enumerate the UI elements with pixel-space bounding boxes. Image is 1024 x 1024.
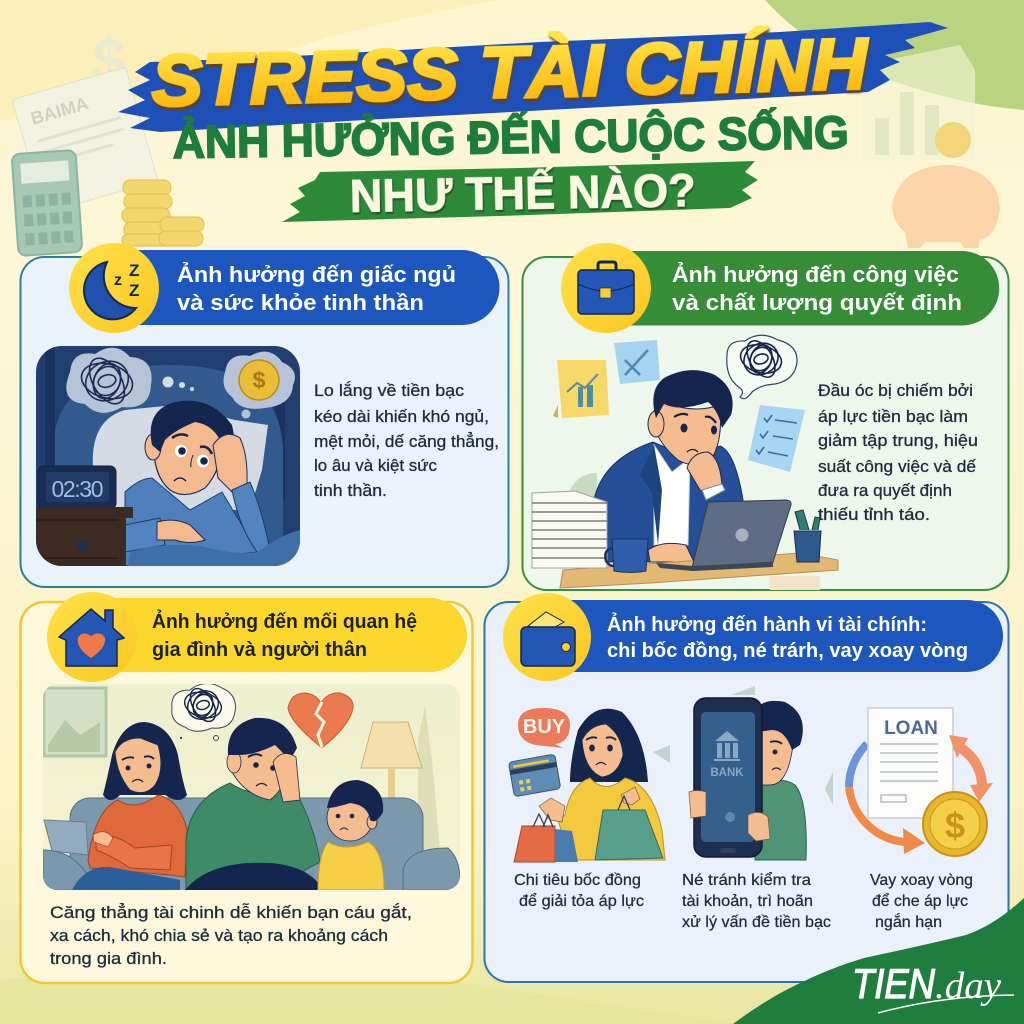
alarm clock: 02:30 [52, 476, 104, 502]
thought bubble: coin [224, 352, 295, 409]
caption: impulse: để giải tỏa áp lực [519, 892, 644, 910]
sticky note: checklist [748, 405, 805, 472]
text: sleep: kéo dài khiến khó ngủ, [314, 407, 489, 426]
phone [694, 698, 762, 857]
icon: moon [69, 243, 159, 333]
text: work: thiếu tỉnh táo. [818, 505, 930, 524]
man [593, 370, 752, 562]
text: family [50, 903, 412, 968]
caption: loan: Vay xoay vòng [870, 872, 973, 889]
text: sleep: mệt mỏi, dế căng thẳng, [314, 432, 499, 451]
illustration: loan cycle [849, 708, 993, 856]
man [125, 401, 270, 566]
text: family: trong gia đình. [50, 949, 167, 968]
mug [605, 539, 648, 572]
thought bubble: coin: $ [253, 367, 266, 393]
text: sleep: tinh thần. [314, 481, 387, 500]
header: work: và chất lượng quyết định [672, 290, 962, 315]
title line 3: NHƯ THẾ NÀO? [349, 164, 696, 222]
header: sleep [130, 250, 500, 325]
brush: blue [118, 22, 948, 132]
header: family: gia đình và người thân [152, 639, 367, 661]
sticky note: graph [614, 340, 660, 384]
footer: green wave with logo [733, 898, 1024, 1024]
lamp [361, 722, 422, 802]
illustration: stressed man at desk [532, 335, 838, 590]
header: work: Ảnh hưởng đến công việc [672, 262, 959, 287]
background finance decorations: BAIMA [28, 93, 91, 129]
child [318, 780, 384, 890]
title line 2: ẢNH HƯỞNG ĐẾN CUỘC SỐNG [172, 106, 849, 168]
loan document [868, 708, 953, 818]
background finance decorations: $ [92, 27, 126, 96]
wall picture [44, 688, 106, 756]
icon: moon: Z [129, 261, 139, 280]
sticky note: chart [553, 360, 609, 418]
illustration: family on sofa [43, 683, 460, 893]
icon: house with heart [47, 592, 137, 682]
man on sofa [185, 718, 323, 890]
desk [560, 553, 838, 590]
text: sleep: lo âu và kiệt sức [314, 456, 437, 475]
icon: moon: Z [129, 281, 139, 300]
icon: briefcase [561, 243, 651, 333]
logo [852, 960, 1014, 1013]
panel: family [20, 592, 472, 983]
caption: impulse: Chi tiêu bốc đồng [514, 872, 641, 889]
brush: green [282, 161, 758, 222]
title [118, 22, 948, 222]
text: family: Căng thẳng tài chinh dễ khiến bạn cáu gắt, [50, 903, 412, 922]
thought bubble: work [727, 335, 797, 399]
text: work: suất công việc và dế [818, 457, 977, 476]
caption: loan: để che áp lực [872, 892, 968, 910]
caption: loan: ngắn hạn [875, 912, 942, 931]
icon: moon: z [114, 272, 122, 289]
logo: .day [935, 965, 1001, 1007]
caption: impulse [514, 872, 644, 910]
header: sleep: Ảnh hưởng đến giấc ngủ [177, 262, 456, 287]
paper stack [532, 491, 607, 568]
text: work: giảm tập trung, hiệu [818, 431, 978, 450]
woman [72, 722, 187, 890]
broken heart [288, 693, 353, 747]
caption: avoidance: xử lý vấn đề tiền bạc [682, 914, 831, 931]
header: work [625, 251, 999, 326]
header: financial behaviour: chi bốc đồng, né trárh, vay xoay vòng [607, 639, 968, 662]
text: sleep: Lo lắng về tiền bạc [314, 381, 465, 400]
panel: sleep [20, 243, 508, 587]
icon: wallet [503, 593, 591, 681]
credit card [508, 754, 561, 797]
speech bubble: BUY: BUY [523, 716, 566, 738]
header: sleep: và sức khỏe tinh thần [177, 290, 424, 315]
caption: avoidance: Né tránh kiểm tra [682, 871, 811, 889]
coin [923, 792, 987, 856]
nightstand [36, 507, 133, 566]
illustration: man awake in bed [36, 346, 300, 566]
title line 1: STRESS TÀI CHÍNH [150, 24, 870, 122]
header: family [110, 598, 467, 672]
header: family: Ảnh hưởng đến mối quan hệ [152, 610, 417, 633]
laptop [656, 500, 791, 571]
header: financial behaviour: Ảnh hưởng đến hành vi tài chính: [607, 613, 927, 636]
panel: financial behaviour [484, 593, 1008, 982]
text: work: áp lực tiền bạc làm [818, 407, 968, 426]
text: sleep [314, 381, 499, 500]
logo: TIEN [852, 960, 936, 1007]
sofa [43, 798, 460, 893]
pen cup [794, 510, 821, 562]
text: work: Đầu óc bị chiếm bởi [818, 381, 973, 400]
panel: work [522, 243, 1008, 590]
caption: avoidance [682, 871, 831, 931]
caption: avoidance: tài khoản, trì hoãn [682, 893, 813, 910]
caption: loan [870, 872, 973, 931]
woman with bags [514, 709, 665, 862]
loan document: LOAN [884, 718, 938, 739]
text: work [818, 381, 978, 524]
coin: $ [945, 805, 965, 846]
illustration: hiding behind bank phone [689, 698, 806, 860]
thought bubble: family [172, 683, 235, 740]
speech bubble: BUY [518, 708, 570, 748]
alarm clock [38, 466, 116, 509]
text: work: đưa ra quyết định [818, 481, 952, 500]
text: family: xa cách, khó chia sẻ và tạo ra khoảng cách [50, 926, 388, 945]
background finance decorations [12, 27, 1000, 256]
phone: BANK [710, 767, 744, 779]
header: financial behaviour [565, 600, 1003, 672]
illustration: impulse shopping [508, 708, 665, 862]
thought bubble: tangled worries [66, 348, 152, 413]
